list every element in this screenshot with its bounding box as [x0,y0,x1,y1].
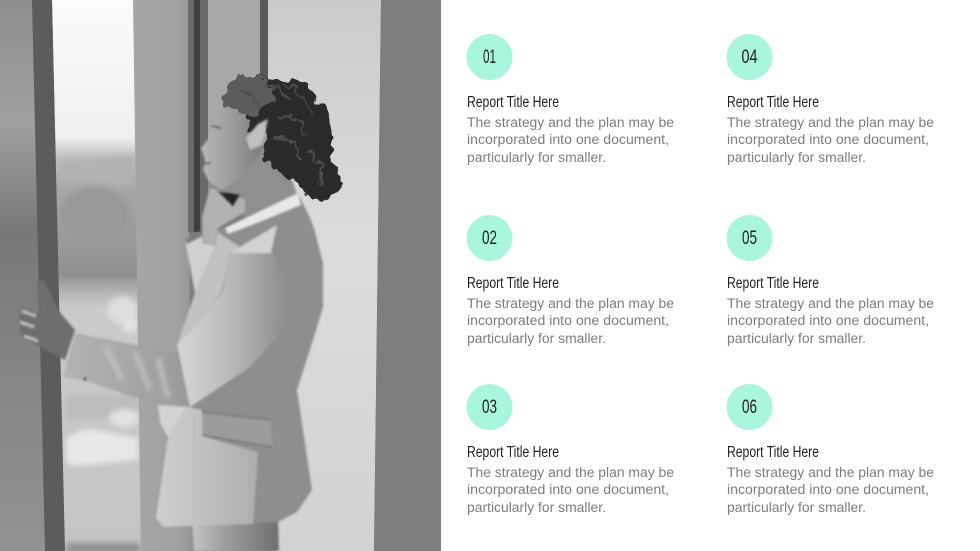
upper sleeve [176,252,274,408]
number badge 02 [466,215,512,261]
item body 06: The strategy and the plan may be [727,465,934,480]
item body 05: particularly for smaller. [727,331,866,346]
item body 02 [467,296,674,346]
ear and hands [18,119,301,360]
neck [227,160,298,217]
sleeve fold [105,345,168,398]
light wall [268,0,381,551]
collar [225,193,301,234]
item body 03: The strategy and the plan may be [467,465,674,480]
number badge 03: 03 [482,397,497,418]
item body 03: incorporated into one document, [467,482,669,497]
item body 05 [727,296,934,346]
phone hand [202,188,245,245]
item body 03: particularly for smaller. [467,500,606,515]
item body 05: The strategy and the plan may be [727,296,934,311]
shirt hem [158,405,192,437]
window view [52,0,141,551]
hand on frame [18,280,75,360]
number badge 05: 05 [742,228,757,249]
number badge 03 [466,384,512,430]
item title 05: Report Title Here [727,275,819,292]
phone [217,191,240,207]
number badge 04 [726,34,772,80]
forearm sleeve [63,333,190,407]
central column [133,0,191,551]
item body 03 [467,465,674,515]
jacket body [178,196,324,523]
lower jacket lit side [156,407,258,527]
item body 01: The strategy and the plan may be [467,115,674,130]
item title 04: Report Title Here [727,94,819,111]
item 06 [726,384,934,515]
item 03 [466,384,674,515]
item body 02: The strategy and the plan may be [467,296,674,311]
item body 04: particularly for smaller. [727,150,866,165]
number badge 06 [726,384,772,430]
grey glass panel [208,0,260,150]
number badge 04: 04 [742,47,758,68]
number badge 05 [726,215,772,261]
item 02 [466,215,674,346]
hair [224,74,345,204]
item body 01 [467,115,674,165]
number badge 01: 01 [483,47,496,68]
item body 01: particularly for smaller. [467,150,606,165]
right column [374,0,441,551]
item 05 [726,215,934,346]
item title 02: Report Title Here [467,275,559,292]
clothing and body [63,95,323,551]
raised cuff [185,230,215,293]
item body 06: incorporated into one document, [727,482,929,497]
item body 04: The strategy and the plan may be [727,115,934,130]
item body 04 [727,115,934,165]
item 01 [466,34,674,165]
item body 02: particularly for smaller. [467,331,606,346]
window frame [32,0,65,551]
photo: businesswoman on phone at a window [0,0,441,551]
woman figure [18,74,345,551]
number badge 02: 02 [482,228,497,249]
lapel front [177,232,240,345]
item body 04: incorporated into one document, [727,132,929,147]
dark mullion [188,0,208,232]
item title 01: Report Title Here [467,94,559,111]
shoulder highlight [230,225,277,257]
number badge 01 [466,34,512,80]
item title 03: Report Title Here [467,444,559,461]
number badge 06: 06 [742,397,757,418]
pocket flap [202,412,273,447]
item body 02: incorporated into one document, [467,313,669,328]
item 04 [726,34,934,165]
trousers [192,518,279,551]
item body 05: incorporated into one document, [727,313,929,328]
item body 06 [727,465,934,515]
ear [246,119,268,150]
item title 06: Report Title Here [727,444,819,461]
item body 01: incorporated into one document, [467,132,669,147]
item body 06: particularly for smaller. [727,500,866,515]
face [201,95,262,190]
